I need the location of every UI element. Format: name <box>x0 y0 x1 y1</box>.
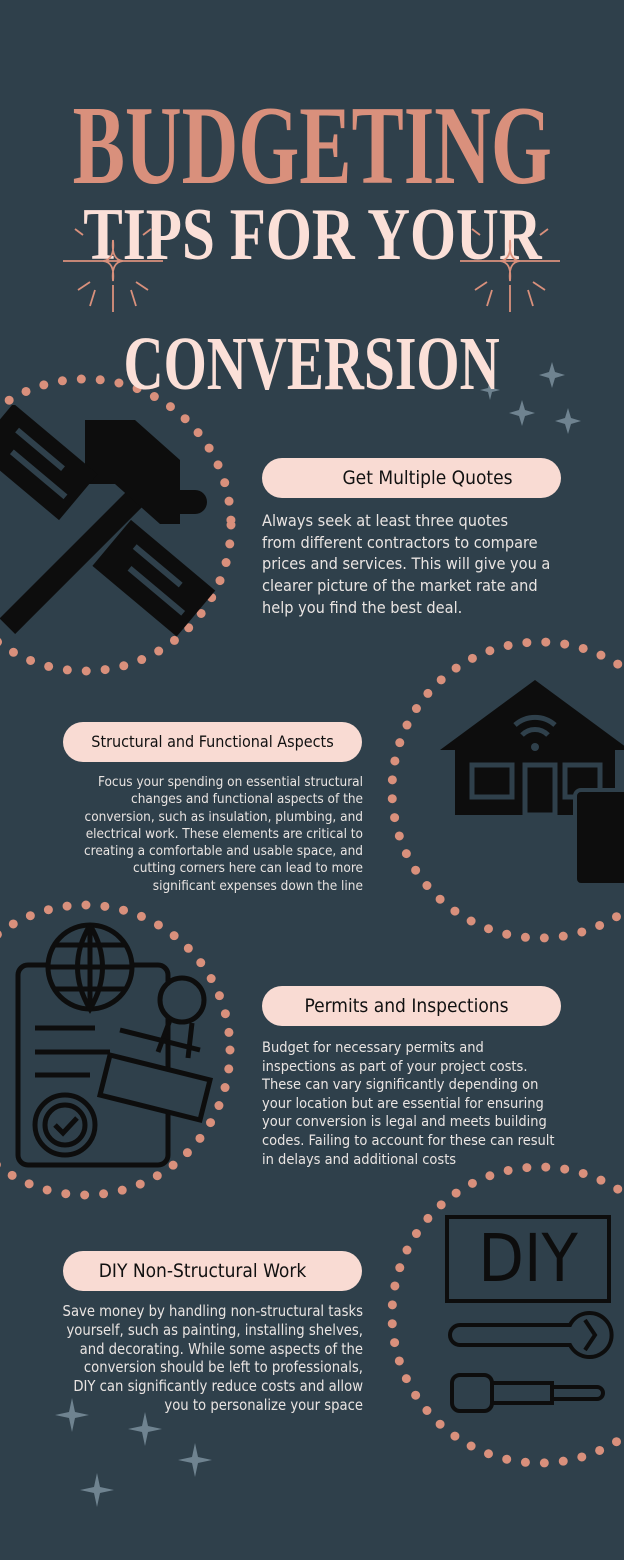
panel 4 text: DIY can significantly reduce costs and allow <box>73 1378 363 1395</box>
panel 3 text: codes. Failing to account for these can result <box>262 1133 555 1149</box>
panel 4 text: conversion should be left to professionals, <box>84 1359 363 1376</box>
panel 3 heading: Permits and Inspections <box>262 986 561 1026</box>
panel 1 text: clearer picture of the market rate and <box>262 576 538 595</box>
panel 1 text: from different contractors to compare <box>262 533 538 552</box>
panel 4 heading: DIY Non-Structural Work: DIY Non-Structural Work <box>99 1260 306 1282</box>
panel 3 text: These can vary significantly depending on <box>262 1077 538 1093</box>
panel 3 heading: Permits and Inspections: Permits and Inspections <box>304 995 509 1017</box>
panel 1 text <box>262 511 550 617</box>
title: BUDGETING: BUDGETING <box>72 84 552 208</box>
panel 2 text: cutting corners here can lead to more <box>133 860 363 876</box>
panel 2 text <box>84 774 363 894</box>
panel 4 heading: DIY Non-Structural Work <box>63 1251 362 1291</box>
panel 2 text: conversion, such as insulation, plumbing, and <box>85 809 363 825</box>
panel 4 text: and decorating. While some aspects of the <box>80 1341 363 1358</box>
panel 3 text: your location but are essential for ensuring <box>262 1096 544 1112</box>
panel 4 text: you to personalize your space <box>164 1397 363 1414</box>
panel 4 text <box>63 1303 363 1414</box>
sparkle decorations <box>63 228 560 312</box>
panel 2 text: electrical work. These elements are critical to <box>86 826 363 842</box>
panel 1 text: prices and services. This will give you a <box>262 554 550 573</box>
panel 3 text: inspections as part of your project costs. <box>262 1059 527 1075</box>
subtitle: CONVERSION: CONVERSION <box>124 322 500 406</box>
panel 1 heading: Get Multiple Quotes: Get Multiple Quotes <box>342 467 513 489</box>
panel 3 text: Budget for necessary permits and <box>262 1040 484 1056</box>
panel 2 text: significant expenses down the line <box>153 878 363 894</box>
panel 2 text: creating a comfortable and usable space, and <box>84 843 363 859</box>
panel 1 text: Always seek at least three quotes <box>262 511 508 530</box>
icon: DIY tools: DIY <box>478 1220 578 1297</box>
icon: smart house <box>440 680 624 883</box>
panel 2 heading: Structural and Functional Aspects: Structural and Functional Aspects <box>91 732 334 751</box>
panel 2 text: Focus your spending on essential structural <box>98 774 363 790</box>
icon: document with globe and stamp <box>16 922 213 1168</box>
panel 2 text: changes and functional aspects of the <box>131 791 363 807</box>
panel 3 text <box>262 1040 555 1168</box>
panel 4 text: yourself, such as painting, installing shelves, <box>66 1322 363 1339</box>
panel 3 text: in delays and additional costs <box>262 1152 456 1168</box>
panel 4 text: Save money by handling non-structural tasks <box>63 1303 363 1320</box>
icon: DIY tools <box>445 1215 614 1413</box>
panel 3 text: your conversion is legal and meets building <box>262 1114 547 1130</box>
icon: hammer and tools <box>0 405 216 636</box>
subtitle: TIPS FOR YOUR: TIPS FOR YOUR <box>83 194 541 276</box>
panel 1 text: help you find the best deal. <box>262 598 462 617</box>
panel 1 heading: Get Multiple Quotes <box>262 458 561 498</box>
panel 2 heading: Structural and Functional Aspects <box>63 722 362 762</box>
